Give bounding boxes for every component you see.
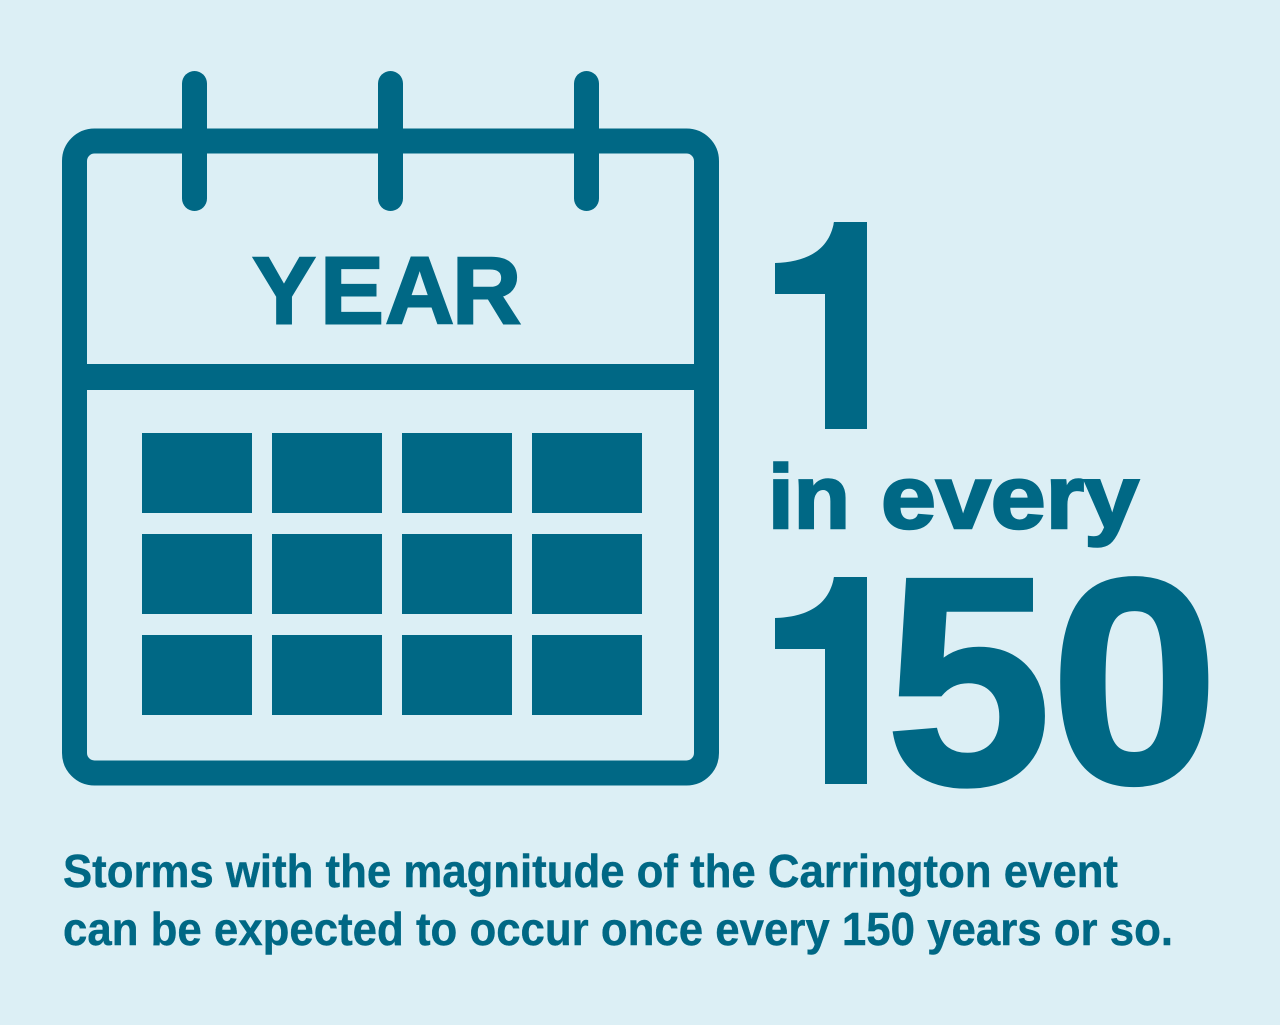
statistic: 150 — [775, 576, 1208, 789]
statistic: 150: 0 — [1050, 518, 1219, 846]
caption line 2: can be expected to occur once every 150 years or so. — [63, 903, 1173, 955]
statistic: in every — [768, 448, 1139, 548]
caption — [63, 845, 1173, 955]
infographic — [62, 71, 1208, 955]
statistic: 150: 5 — [886, 515, 1052, 847]
calendar rings — [182, 71, 599, 211]
statistic: in every: every — [881, 448, 1139, 548]
statistic: 1: 1 — [754, 157, 921, 493]
calendar header divider — [74, 364, 706, 390]
statistic: 150: 1 — [754, 512, 921, 848]
calendar frame — [74, 141, 706, 773]
calendar day grid — [142, 433, 642, 715]
statistic: 1 — [775, 222, 867, 429]
caption line 1: Storms with the magnitude of the Carrington event — [63, 845, 1118, 897]
statistic: in every: in — [768, 448, 850, 548]
icon: calendar — [74, 71, 706, 773]
calendar label: YEAR — [252, 238, 521, 344]
